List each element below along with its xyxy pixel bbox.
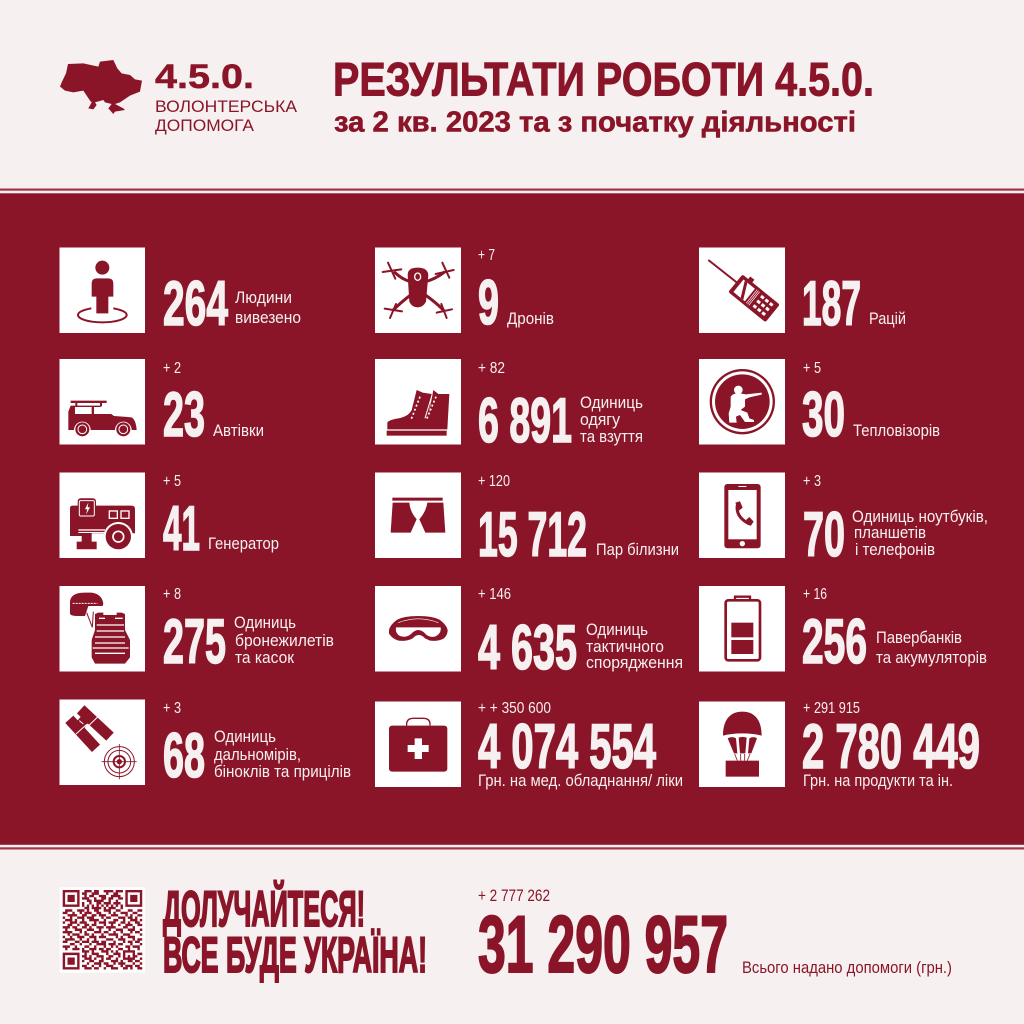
label: і телефонів: [855, 540, 935, 559]
label: та акумуляторів: [876, 648, 987, 667]
icon: generator: [60, 472, 145, 558]
label: [852, 507, 988, 559]
stat: medical equipment funds: [375, 700, 683, 790]
total value: 31 290 957: [478, 900, 728, 990]
increment: + 16: [803, 586, 827, 603]
increment: + 5: [803, 360, 821, 377]
increment: + 8: [163, 586, 181, 603]
increment: + 3: [163, 700, 181, 717]
stat: rangefinders, binoculars, sights: [60, 700, 351, 791]
label: Генератор: [208, 534, 279, 553]
increment: + 7: [478, 247, 495, 264]
panel: results band: [0, 188, 1024, 850]
subtitle: за 2 кв. 2023 та з початку діяльності: [334, 106, 856, 138]
label: [586, 620, 683, 672]
increment: + 291 915: [803, 700, 860, 717]
label: одягу: [580, 410, 620, 429]
label: бронежилетів: [235, 631, 334, 650]
stat: underwear: [375, 472, 679, 570]
stat: radios: [699, 248, 906, 339]
label: Дронів: [507, 309, 554, 328]
label: Одиниць: [234, 613, 296, 632]
label: Одиниць ноутбуків,: [852, 507, 988, 526]
label: Автівки: [213, 421, 264, 440]
value: 9: [478, 268, 499, 338]
stat: clothes and footwear: [375, 359, 643, 456]
increment: + + 350 600: [478, 700, 551, 717]
icon: walkie-talkie: [699, 248, 785, 333]
label: Павербанків: [876, 628, 962, 647]
icon: battery: [699, 586, 785, 672]
label: [214, 727, 351, 781]
stat: drones: [375, 247, 554, 338]
value: 4 074 554: [478, 712, 656, 782]
label: Одиниць: [580, 393, 643, 412]
stat: tactical gear: [375, 586, 683, 683]
icon: map of Ukraine: [60, 60, 142, 114]
logo subtitle: ВОЛОНТЕРСЬКА: [155, 97, 298, 116]
label: та касок: [235, 648, 295, 667]
label: біноклів та прицілів: [214, 762, 351, 781]
logo name: 4.5.0.: [155, 58, 254, 96]
icon: soldier in sight: [699, 359, 785, 444]
label: вивезено: [235, 308, 301, 327]
call to action: [163, 880, 427, 983]
icon: first aid kit: [375, 702, 461, 787]
value: 68: [163, 721, 205, 791]
title: РЕЗУЛЬТАТИ РОБОТИ 4.5.0.: [333, 52, 874, 106]
QR code: [60, 887, 145, 973]
label: дальномірів,: [214, 745, 301, 764]
label: Тепловізорів: [853, 421, 940, 440]
icon: goggles: [375, 586, 461, 672]
increment: + 82: [478, 360, 505, 377]
stat: thermal imagers: [699, 359, 940, 450]
value: 30: [802, 380, 845, 450]
total label: Всього надано допомоги (грн.): [742, 958, 952, 977]
stat: vests and helmets: [60, 586, 334, 677]
label: та взуття: [580, 427, 643, 446]
value: 256: [802, 607, 867, 677]
icon: person on location ring: [60, 248, 145, 333]
icon: boots: [375, 359, 461, 444]
label: Рацій: [869, 309, 906, 328]
stat: laptops, tablets, phones: [699, 472, 988, 570]
value: 41: [163, 494, 200, 564]
increment: + 5: [163, 473, 181, 490]
stat: cars: [60, 359, 264, 450]
icon: underwear: [375, 472, 461, 558]
logo subtitle: ДОПОМОГА: [155, 116, 255, 135]
stat: generators: [60, 472, 279, 564]
value: 275: [163, 607, 226, 677]
stat: power banks and batteries: [699, 586, 987, 677]
value: 187: [802, 269, 861, 339]
call to action: ДОЛУЧАЙТЕСЯ!: [163, 880, 365, 937]
stat: food and other funds: [699, 700, 980, 790]
value: 6 891: [478, 386, 572, 456]
value: 23: [163, 380, 205, 450]
increment: + 2: [163, 360, 181, 377]
label: [235, 288, 301, 327]
icon: smartphone: [699, 472, 785, 558]
label: [580, 393, 643, 446]
increment: + 146: [478, 586, 511, 603]
icon: binoculars and target: [60, 700, 145, 785]
label: Грн. на мед. обладнання/ ліки: [478, 771, 683, 790]
label: [876, 628, 987, 667]
label: планшетів: [854, 523, 926, 542]
increment: + 3: [803, 473, 821, 490]
increment: + 120: [478, 473, 510, 490]
icon: helmet and vest: [60, 586, 145, 672]
label: Пар білизни: [596, 540, 679, 559]
label: Одиниць: [586, 620, 648, 639]
label: [234, 613, 334, 667]
call to action: ВСЕ БУДЕ УКРАЇНА!: [163, 927, 427, 983]
logo subtitle: [155, 97, 298, 135]
stat: people evacuated: [60, 248, 301, 339]
label: спорядження: [586, 653, 683, 672]
value: 70: [803, 500, 845, 570]
label: Одиниць: [214, 727, 276, 746]
value: 264: [163, 269, 228, 339]
label: тактичного: [586, 637, 664, 656]
label: Грн. на продукти та ін.: [803, 771, 953, 790]
label: Людини: [235, 288, 292, 307]
value: 4 635: [478, 613, 577, 683]
icon: car: [60, 359, 145, 444]
total increment: + 2 777 262: [478, 886, 550, 905]
icon: drone: [375, 248, 461, 333]
header logo: [60, 58, 298, 135]
value: 15 712: [478, 500, 587, 570]
icon: parachute with cargo: [699, 702, 785, 787]
